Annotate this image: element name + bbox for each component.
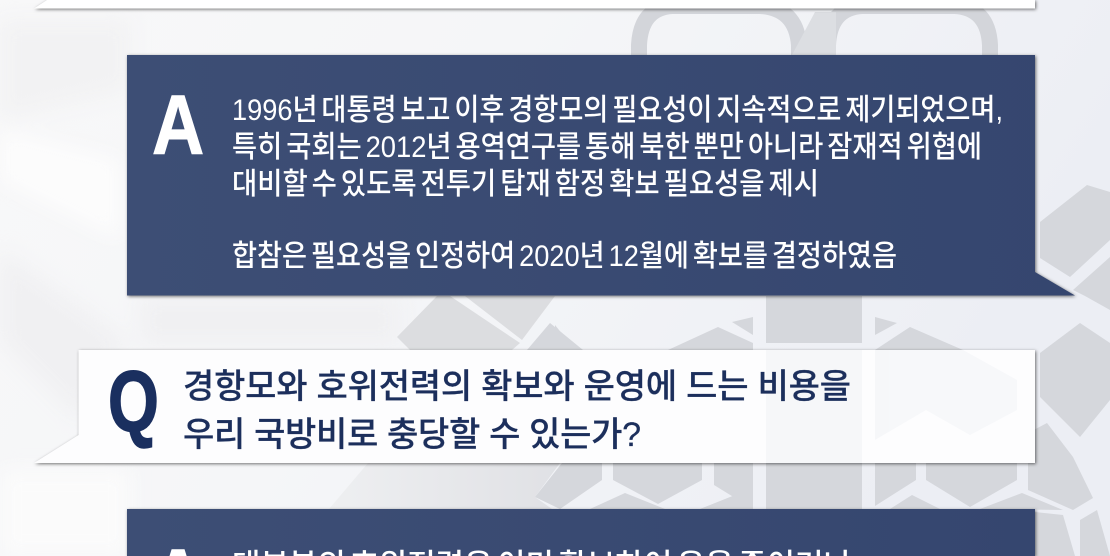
answer 1 text: 대비할 수 있도록 전투기 탑재 함정 확보 필요성을 제시 [232,168,819,201]
answer 1 text: 합참은 필요성을 인정하여 2020년 12월에 확보를 결정하였음 [232,240,897,273]
question 2 letter Q: Q [108,354,159,450]
faint emblem showing through box [766,350,1017,463]
panel: question 2 [34,350,1035,463]
panel: answer 2 (cropped) [127,509,1035,556]
ring connector [792,12,836,55]
question 2 text: 경항모와 호위전력의 확보와 운영에 드는 비용을 [183,368,851,406]
question 2 text: 우리 국방비로 충당할 수 있는가? [183,416,641,454]
question 2 speech box [34,350,1035,463]
watermark emblem [397,6,1110,556]
top question box (cropped) [34,0,1035,8]
emblem shell cells [397,296,520,350]
answer 1 speech box [127,55,1075,296]
emblem top rings [639,6,990,110]
answer 1 letter A: A [152,78,204,172]
answer 1 text [232,94,1003,273]
panel: answer 1 [127,55,1075,296]
answer 1 text: 특히 국회는 2012년 용역연구를 통해 북한 뿐만 아니라 잠재적 위협에 [232,131,982,164]
answer 2 box [127,509,1035,556]
background lower triangle [329,463,560,509]
background fold shapes [0,20,400,556]
answer 1 text: 1996년 대통령 보고 이후 경항모의 필요성이 지속적으로 제기되었으며, [232,94,1003,127]
question 2 text [183,368,851,454]
